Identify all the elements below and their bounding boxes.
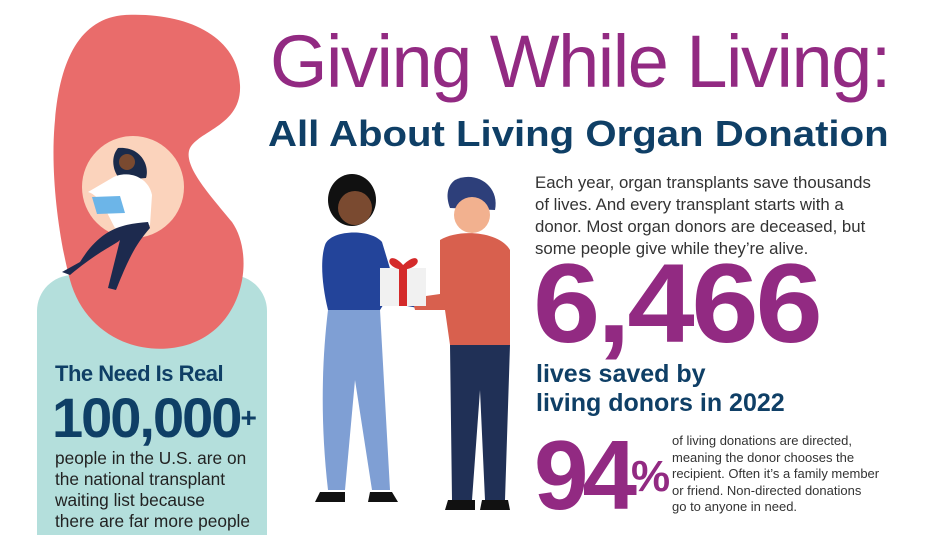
stat label: living donors in 2022: [536, 389, 785, 417]
stat label: [536, 360, 785, 417]
title: Giving While Living:: [270, 20, 890, 103]
intro paragraph: [535, 173, 871, 258]
panel: the need is real: [37, 275, 267, 535]
94% description: meaning the donor chooses the: [672, 450, 854, 464]
need description: people in the U.S. are on: [55, 448, 246, 468]
intro paragraph: some people give while they’re alive.: [535, 239, 808, 258]
subtitle: All About Living Organ Donation: [268, 113, 889, 154]
stat: 100,000+: 100,000+: [52, 386, 255, 449]
stat: 6,466: 6,466: [533, 241, 820, 366]
stat label: lives saved by: [536, 360, 706, 388]
94% description: of living donations are directed,: [672, 433, 852, 448]
illustration: kidney with woman: [54, 14, 244, 349]
stat: 94%: 94%: [534, 420, 670, 530]
need description: waiting list because: [55, 490, 205, 510]
need description: [55, 448, 250, 531]
need description: there are far more people: [55, 511, 250, 531]
94% description: recipient. Often it’s a family member: [672, 466, 879, 481]
intro paragraph: donor. Most organ donors are deceased, but: [535, 217, 865, 236]
illustration: two people exchanging gift: [315, 174, 510, 510]
intro paragraph: of lives. And every transplant starts with a: [535, 195, 844, 214]
94% description: or friend. Non-directed donations: [672, 482, 861, 498]
heading: the need is real: The Need Is Real: [55, 361, 223, 386]
intro paragraph: Each year, organ transplants save thousands: [535, 173, 871, 192]
need description: the national transplant: [55, 469, 225, 489]
94% description: go to anyone in need.: [672, 499, 797, 514]
94% description: [672, 433, 879, 514]
